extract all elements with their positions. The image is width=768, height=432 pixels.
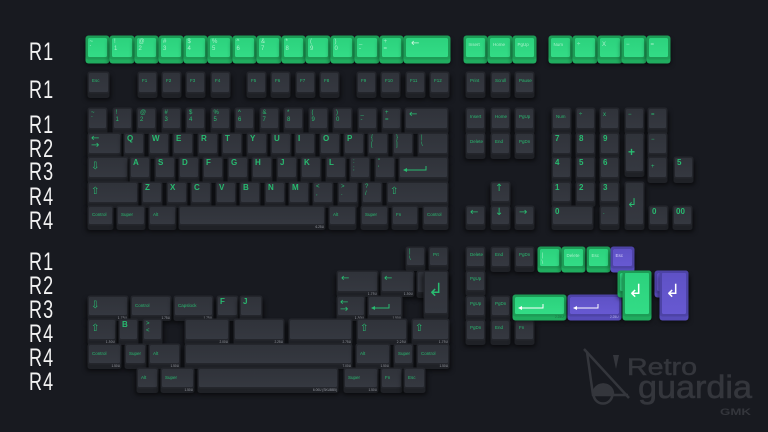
- green number row keys: [85, 36, 451, 65]
- alpha block row 1: #: [164, 110, 168, 116]
- green number row keys: (: [310, 39, 312, 45]
- green number row keys: =: [384, 46, 387, 52]
- green number row keys: -: [359, 46, 361, 52]
- row labels: R1: [29, 248, 54, 276]
- accent keys row: |: [542, 253, 543, 259]
- green numpad top keys: ÷: [577, 42, 580, 48]
- row labels: [29, 38, 54, 396]
- key: tall plus: [626, 134, 643, 171]
- extra nav kit keys: PgDn: [519, 252, 530, 257]
- alpha block row 3: H: [255, 158, 261, 167]
- alpha block row 3: K: [304, 158, 310, 167]
- kit row R3 right keys: ←: [340, 297, 348, 308]
- alpha block row 4: ⇧: [390, 186, 398, 197]
- kit row R5 keys: 1.50U: [380, 364, 389, 368]
- accent keys row: Esc: [616, 253, 623, 258]
- kit row R5 keys: Super: [398, 351, 410, 356]
- alpha block row 2: ←: [91, 133, 99, 144]
- alpha block row 2: \: [421, 142, 423, 148]
- alpha block row 4: /: [365, 190, 367, 196]
- accent keys row: Delete: [566, 253, 580, 258]
- row labels: R4: [29, 320, 54, 348]
- row labels: R1: [29, 76, 54, 104]
- alpha block row 4: ,: [316, 190, 318, 196]
- green number row keys: ←: [411, 38, 419, 49]
- kit row R4 keys: B: [122, 320, 128, 329]
- key: tall plus: +: [628, 145, 635, 159]
- kit row R4 keys: 1.50U: [106, 340, 115, 344]
- dark function row: F7: [300, 78, 305, 83]
- green numpad top keys: [548, 36, 671, 66]
- alpha block row 2: I: [298, 134, 300, 143]
- alpha block row 3: F: [206, 158, 211, 167]
- alpha block row 1: *: [287, 110, 289, 116]
- alpha block row 1: _: [360, 110, 364, 116]
- alpha block row 5: Super: [121, 212, 133, 217]
- alpha block row 5: Control: [427, 212, 442, 217]
- green number row keys: 4: [188, 46, 191, 52]
- alpha block row 2: W: [152, 134, 160, 143]
- alpha block row 4: [86, 182, 450, 210]
- alpha block row 3: D: [182, 158, 188, 167]
- green enter key: 2.25U: [555, 315, 564, 319]
- kit row R4 keys: ⇧: [415, 323, 423, 334]
- key: tall enter: [626, 183, 643, 224]
- numpad: Num: [556, 114, 566, 119]
- green number row keys: 8: [286, 46, 289, 52]
- alpha block row 1: [86, 108, 450, 136]
- green number row keys: 1: [114, 46, 117, 52]
- dark function row: F9: [361, 78, 366, 83]
- kit row R3 left keys: Control: [135, 303, 150, 308]
- kit row R3 right keys: 1.50U: [392, 316, 401, 320]
- alpha block row 2: }: [396, 135, 398, 141]
- green number row keys: ~: [90, 39, 93, 45]
- dark function row: F1: [142, 78, 147, 83]
- kit row R4 keys: 2.25U: [397, 340, 406, 344]
- alpha block row 2: R: [201, 134, 207, 143]
- green number row keys: 2: [138, 46, 142, 52]
- numpad: 5: [579, 158, 583, 167]
- kit row R2 backspace keys: ←: [341, 273, 349, 284]
- dark function row: [86, 72, 452, 100]
- alpha block row 5: Control: [92, 212, 107, 217]
- alpha block row 4: <: [316, 184, 320, 190]
- kit row R6 keys: Esc: [408, 375, 416, 380]
- navigation cluster: [464, 108, 536, 232]
- row labels: R3: [29, 158, 54, 186]
- kit row R5 keys: [86, 344, 452, 372]
- alpha block row 2: E: [176, 134, 181, 143]
- kit row R3 right keys: 1.50U: [355, 316, 364, 320]
- dark function row: F2: [166, 78, 171, 83]
- kit row R2 backspace keys: 1.50U: [404, 292, 413, 296]
- alpha block row 3: A: [133, 158, 139, 167]
- numpad: ÷: [579, 112, 582, 118]
- alpha block row 3: J: [280, 158, 284, 167]
- kit row R1 small keys: \: [409, 256, 411, 262]
- logo text: Retro: Retro: [627, 354, 697, 381]
- kit row R4 keys: >: [146, 321, 150, 327]
- alpha block row 1: (: [312, 110, 314, 116]
- kit row R6 keys: Alt: [141, 375, 146, 380]
- green navigation keys: [463, 36, 537, 65]
- alpha block row 1: !: [116, 110, 117, 116]
- alpha block row 1: `: [91, 116, 93, 122]
- alpha block row 1: 0: [336, 116, 339, 122]
- extra nav kit keys: PgDn: [470, 325, 481, 330]
- purple ISO enter key: ↲: [665, 281, 680, 302]
- icon: logo triangle and half circle: [584, 349, 629, 404]
- dark function row: F12: [434, 78, 442, 83]
- navigation cluster: PgUp: [519, 114, 530, 119]
- dark function row: Esc: [92, 78, 100, 83]
- navigation cluster: Insert: [470, 114, 481, 119]
- dark function row: F6: [275, 78, 280, 83]
- green numpad top keys: =: [650, 42, 654, 48]
- alpha block row 1: %: [214, 110, 219, 116]
- green navigation keys: Home: [493, 42, 505, 47]
- dark function row: F5: [251, 78, 256, 83]
- alpha block row 5: [86, 206, 450, 232]
- extra nav kit keys: End: [495, 252, 503, 257]
- dark function row: F4: [215, 78, 220, 83]
- green number row keys: 0: [334, 46, 338, 52]
- alpha block row 3: ⇩: [91, 161, 99, 172]
- numpad: 7: [555, 134, 559, 143]
- kit row R5 keys: Control: [421, 351, 436, 356]
- alpha block row 4: >: [341, 184, 345, 190]
- green numpad top keys: X: [602, 42, 606, 48]
- kit row R5 keys: Control: [92, 351, 107, 356]
- green number row keys: #: [163, 39, 166, 45]
- alpha block row 2: Q: [127, 134, 133, 143]
- key: spacebar 6.25u: [180, 207, 324, 224]
- key: tall enter: ↲: [627, 196, 637, 210]
- green number row keys: *: [286, 39, 288, 45]
- alpha block row 5: 6.25U: [315, 225, 324, 229]
- navigation cluster: Delete: [470, 139, 483, 144]
- kit row R6 keys: Fn: [385, 375, 390, 380]
- kit row R3 left keys: 1.75U: [203, 316, 212, 320]
- numpad: 0: [652, 207, 656, 216]
- navigation cluster: End: [495, 139, 503, 144]
- alpha block row 1: 9: [312, 116, 315, 122]
- dark function row: F11: [410, 78, 417, 83]
- alpha block row 1: ): [336, 110, 338, 116]
- alpha block row 1: ←: [409, 109, 417, 120]
- kit row R4 keys: 1.75U: [439, 340, 448, 344]
- alpha block row 4: ?: [365, 184, 368, 190]
- alpha block row 1: @: [140, 110, 146, 116]
- alpha block row 3: :: [353, 159, 355, 165]
- alpha block row 4: V: [219, 183, 224, 192]
- alpha block row 1: 1: [116, 116, 119, 122]
- alpha block row 3: G: [231, 158, 237, 167]
- numpad: −: [628, 112, 632, 118]
- row labels: R4: [29, 368, 54, 396]
- kit row R2 backspace keys: [334, 270, 416, 300]
- green number row keys: 7: [261, 46, 264, 52]
- accent keys row: \: [542, 260, 543, 266]
- alpha block row 2: {: [371, 135, 373, 141]
- numpad: +: [651, 164, 655, 170]
- green numpad top keys: −: [626, 42, 630, 48]
- alpha block row 4: B: [243, 183, 249, 192]
- numpad: x: [603, 112, 606, 118]
- alpha block row 4: X: [170, 183, 175, 192]
- green number row keys: 6: [236, 46, 240, 52]
- numpad: 9: [603, 134, 607, 143]
- extra nav kit keys: PgUp: [470, 276, 481, 281]
- alpha block row 2: |: [421, 135, 423, 141]
- kit row R2 backspace keys: ←: [384, 273, 392, 284]
- logo text: guardia: guardia: [638, 369, 752, 405]
- alpha block row 4: N: [268, 183, 274, 192]
- alpha block row 3: L: [329, 158, 334, 167]
- kit row R5 keys: 1.50U: [111, 364, 120, 368]
- dark function row: F8: [324, 78, 329, 83]
- numpad: 4: [555, 158, 559, 167]
- kit row R3 left keys: J: [243, 297, 247, 306]
- print screen cluster: Print: [470, 78, 479, 83]
- green number row keys: +: [384, 39, 387, 45]
- alpha block row 2: ]: [396, 142, 398, 148]
- kit row R1 small keys: Prt: [433, 252, 439, 257]
- navigation cluster: ←: [470, 207, 478, 218]
- kit row R5 keys: Alt: [360, 351, 365, 356]
- kit row R5 keys: Super: [129, 351, 141, 356]
- row labels: R3: [29, 296, 54, 324]
- alpha block row 5: Fn: [396, 212, 401, 217]
- alpha block row 1: 5: [214, 116, 217, 122]
- kit row R3 left keys: 1.75U: [161, 316, 170, 320]
- purple enter key: [564, 294, 622, 322]
- accent keys row: Esc: [592, 253, 599, 258]
- numpad: 3: [603, 183, 607, 192]
- row labels: R4: [29, 183, 54, 211]
- key: dark ISO enter: ↲: [428, 280, 443, 301]
- dark function row: F10: [385, 78, 393, 83]
- navigation cluster: →: [519, 207, 527, 218]
- alpha block row 4: .: [341, 190, 343, 196]
- purple enter key: 2.25U: [610, 315, 618, 319]
- alpha block row 4: M: [292, 183, 299, 192]
- green navigation keys: PgUp: [518, 42, 529, 47]
- logo text: GMK: GMK: [720, 407, 751, 418]
- key: enter: [400, 158, 447, 177]
- alpha block row 3: ;: [353, 166, 355, 172]
- numpad: 5: [677, 158, 681, 167]
- alpha block row 2: →: [91, 140, 99, 151]
- numpad: 2: [579, 183, 583, 192]
- row labels: R1: [29, 111, 54, 139]
- logo: Retroguardia GMK: [583, 348, 752, 418]
- alpha block row 1: 2: [140, 116, 143, 122]
- green number row keys: 9: [310, 46, 313, 52]
- kit row R6 keys: Super: [348, 375, 360, 380]
- alpha block row 3: ": [378, 159, 380, 165]
- kit row R2 backspace keys: 1.75U: [368, 292, 377, 296]
- alpha block row 4: Z: [145, 183, 150, 192]
- alpha block row 1: +: [385, 110, 389, 116]
- kit row R3 left keys: 1.75U: [118, 316, 127, 320]
- print screen cluster: Scroll: [495, 78, 506, 83]
- row labels: R2: [29, 272, 54, 300]
- green number row keys: _: [359, 39, 362, 45]
- alpha block row 1: 7: [262, 116, 266, 122]
- alpha block row 3: S: [158, 158, 163, 167]
- kit row R4 keys: ⇧: [91, 323, 99, 334]
- navigation cluster: ↑: [495, 183, 503, 194]
- kit row R3 right keys: [334, 296, 404, 323]
- kit row R5 keys: 1.50U: [170, 364, 179, 368]
- alpha block row 4: C: [194, 183, 200, 192]
- numpad: =: [651, 112, 655, 118]
- kit row R5 keys: 1.50U: [439, 364, 448, 368]
- print screen cluster: Pause: [519, 78, 532, 83]
- kit row R4 keys: 2.00U: [219, 340, 228, 344]
- kit row R5 keys: Alt: [153, 351, 158, 356]
- alpha block row 1: 6: [238, 116, 241, 122]
- alpha block row 1: =: [385, 116, 389, 122]
- alpha block row 2: T: [225, 134, 230, 143]
- alpha block row 2: O: [323, 134, 329, 143]
- alpha block row 1: -: [360, 116, 362, 122]
- alpha block row 2: [86, 132, 450, 161]
- kit row R6 keys: 6.00U (SKUBB5): [313, 388, 337, 392]
- alpha block row 5: Super: [365, 212, 377, 217]
- alpha block row 4: ⇧: [91, 186, 99, 197]
- numpad: 8: [579, 134, 583, 143]
- alpha block row 2: U: [274, 134, 280, 143]
- kit row R6 keys: 1.50U: [368, 388, 377, 392]
- extra nav kit keys: PgUp: [470, 301, 481, 306]
- green number row keys: $: [188, 39, 191, 45]
- alpha block row 1: ~: [91, 110, 95, 116]
- kit row R4 keys: [86, 318, 452, 347]
- numpad: 0: [555, 207, 559, 216]
- extra nav kit keys: PgDn: [495, 301, 506, 306]
- navigation cluster: PgDn: [519, 139, 530, 144]
- alpha block row 1: 3: [164, 116, 168, 122]
- alpha block row 2: Y: [250, 134, 255, 143]
- kit row R6 keys: Super: [165, 375, 177, 380]
- kit row R6 keys: 1.50U: [184, 388, 193, 392]
- green navigation keys: Insert: [468, 42, 480, 47]
- kit row R3 left keys: [86, 296, 264, 324]
- print screen cluster: [464, 72, 536, 100]
- green number row keys: @: [138, 39, 145, 45]
- green ISO enter key: ↲: [628, 281, 643, 302]
- alpha block row 1: $: [189, 110, 192, 116]
- numpad: .: [603, 210, 605, 216]
- green number row keys: `: [90, 46, 92, 52]
- kit row R6 keys: [134, 368, 428, 396]
- green number row keys: %: [212, 39, 217, 45]
- navigation cluster: Home: [495, 114, 507, 119]
- accent keys row: [538, 246, 635, 274]
- kit row R4 keys: <: [146, 328, 150, 334]
- alpha block row 5: Alt: [153, 212, 158, 217]
- kit row R3 right keys: →: [340, 304, 348, 315]
- alpha block row 1: ^: [238, 110, 241, 116]
- green enter key: [512, 294, 566, 324]
- alpha block row 1: &: [262, 110, 267, 116]
- kit row R4 keys: 2.75U: [342, 340, 351, 344]
- navigation cluster: ↓: [495, 207, 503, 218]
- kit row R5 keys: 7.00U: [342, 364, 351, 368]
- extra nav kit keys: Delete: [470, 252, 483, 257]
- extra nav kit keys: [464, 246, 536, 348]
- green number row keys: ): [334, 39, 336, 45]
- numpad: 6: [603, 158, 607, 167]
- alpha block row 3: ': [378, 166, 379, 172]
- green numpad top keys: Num: [554, 42, 563, 47]
- kit row R3 left keys: F: [220, 297, 225, 306]
- alpha block row 2: P: [347, 134, 352, 143]
- green number row keys: !: [114, 39, 116, 45]
- alpha block row 3: [86, 156, 450, 185]
- green ISO enter key: [614, 270, 654, 322]
- green number row keys: ^: [236, 39, 239, 45]
- kit row R1 small keys: [404, 246, 450, 273]
- green number row keys: &: [261, 39, 265, 45]
- extra nav kit keys: Fn: [519, 325, 524, 330]
- green number row keys: 3: [163, 46, 166, 52]
- row labels: R4: [29, 344, 54, 372]
- kit row R4 keys: 2.25U: [274, 340, 283, 344]
- row labels: R2: [29, 135, 54, 163]
- numpad: [550, 108, 696, 232]
- kit row R1 small keys: |: [409, 249, 411, 255]
- key: small enter: [369, 297, 401, 315]
- alpha block row 5: Alt: [333, 212, 338, 217]
- row labels: R1: [29, 38, 54, 66]
- dark function row: F3: [190, 78, 195, 83]
- alpha block row 1: 8: [287, 116, 290, 122]
- alpha block row 2: [: [371, 142, 373, 148]
- numpad: 1: [555, 183, 559, 192]
- numpad: 00: [676, 207, 685, 216]
- kit row R3 left keys: Capslock: [178, 303, 197, 308]
- numpad: −: [651, 137, 655, 143]
- kit row R4 keys: ⇧: [360, 323, 368, 334]
- extra nav kit keys: End: [495, 325, 503, 330]
- kit row R3 left keys: ⇩: [91, 300, 99, 311]
- green number row keys: 5: [212, 46, 215, 52]
- row labels: R4: [29, 207, 54, 235]
- alpha block row 1: 4: [189, 116, 192, 122]
- purple ISO enter key: [651, 270, 690, 322]
- key: dark ISO enter: [412, 270, 452, 320]
